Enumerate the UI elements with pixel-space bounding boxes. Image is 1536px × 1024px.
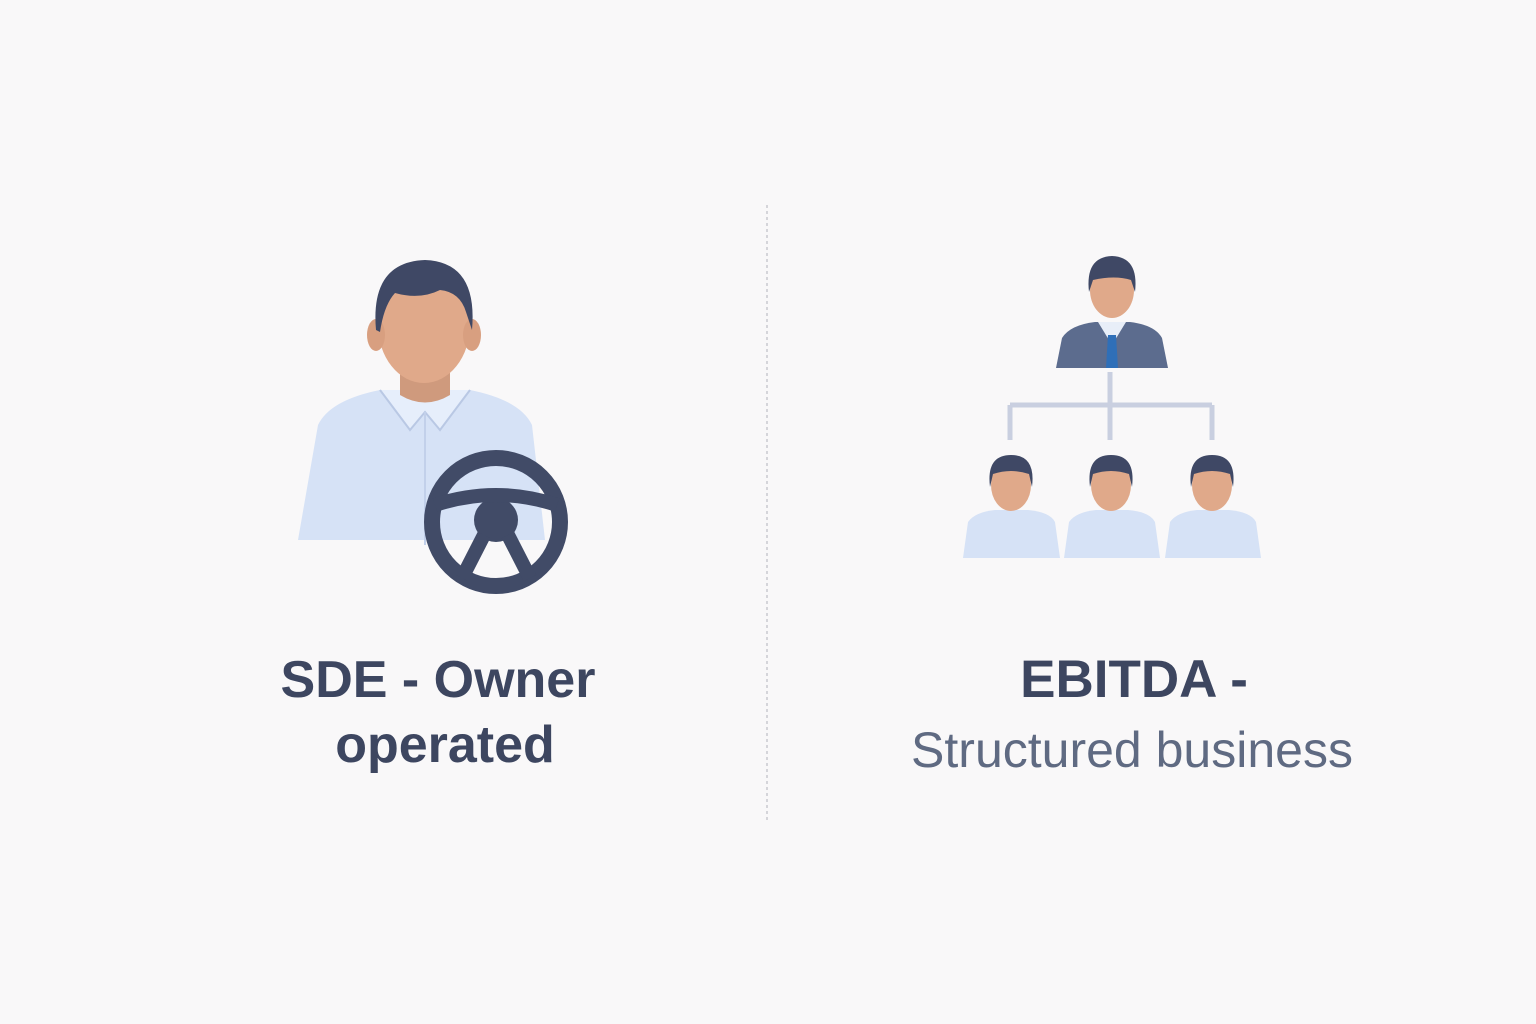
team members (963, 455, 1261, 558)
icon: org chart (963, 256, 1261, 558)
head (378, 267, 470, 383)
neck (400, 360, 450, 402)
text: operated: operated (335, 716, 555, 774)
text: Structured business: Structured business (911, 722, 1353, 778)
steering wheel (432, 458, 560, 586)
heading: SDE: SDE - Owner (281, 651, 595, 709)
shirt (298, 390, 545, 540)
top manager (1056, 256, 1168, 368)
icon: owner operator with steering wheel (298, 260, 560, 586)
hair (375, 260, 473, 332)
heading: EBITDA: EBITDA - (1020, 650, 1248, 709)
connectors (1010, 372, 1212, 440)
